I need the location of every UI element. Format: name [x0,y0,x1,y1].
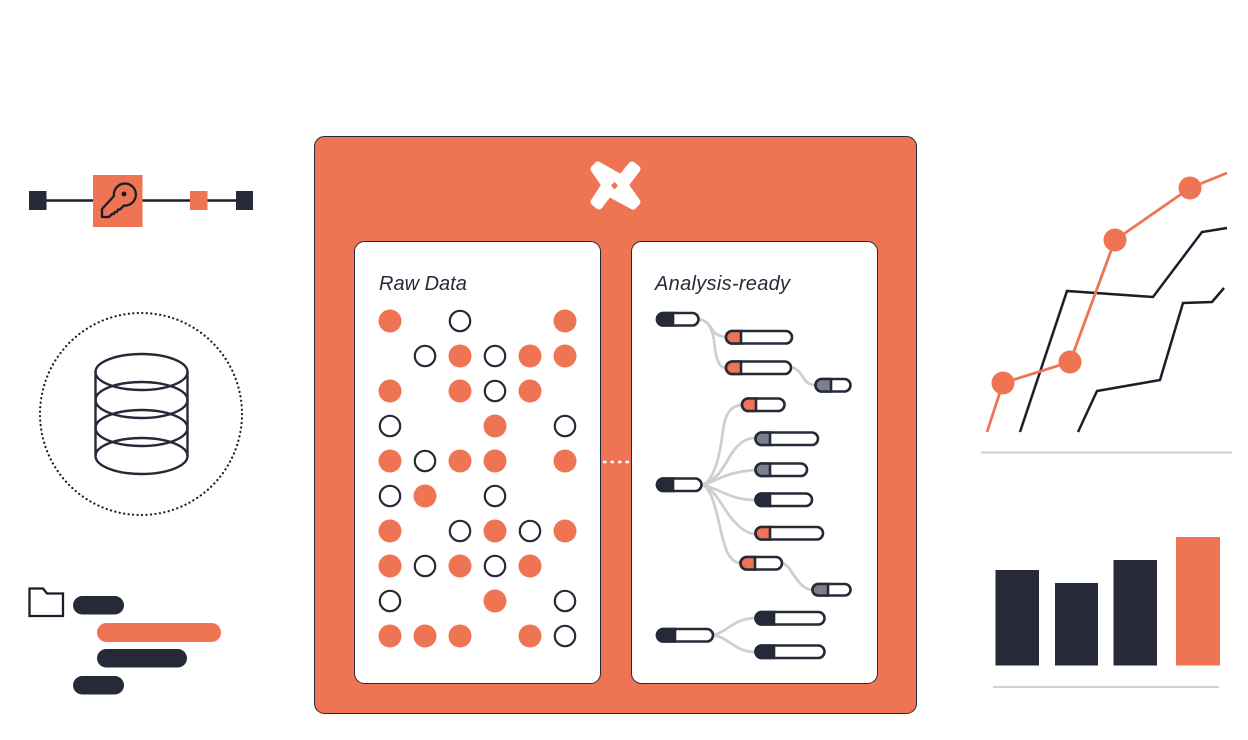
icon: key lineage [29,175,253,227]
icon: database in dotted circle [40,313,242,515]
panel: raw data [354,242,600,684]
icon: folder with file tree bars [30,588,221,694]
line chart [981,173,1232,452]
panel: central orange platform [314,136,916,714]
panel: analysis-ready [632,242,878,684]
heading: raw data: Raw Data [379,273,467,295]
heading: analysis-ready: Analysis-ready [654,273,791,295]
connector: dotted link between cards [603,461,631,463]
dot matrix: filled and hollow circles [378,310,576,648]
bar chart [993,537,1220,687]
lineage connectors [698,319,815,652]
icon: dbt logo [594,165,637,206]
lineage node pills [657,313,850,658]
